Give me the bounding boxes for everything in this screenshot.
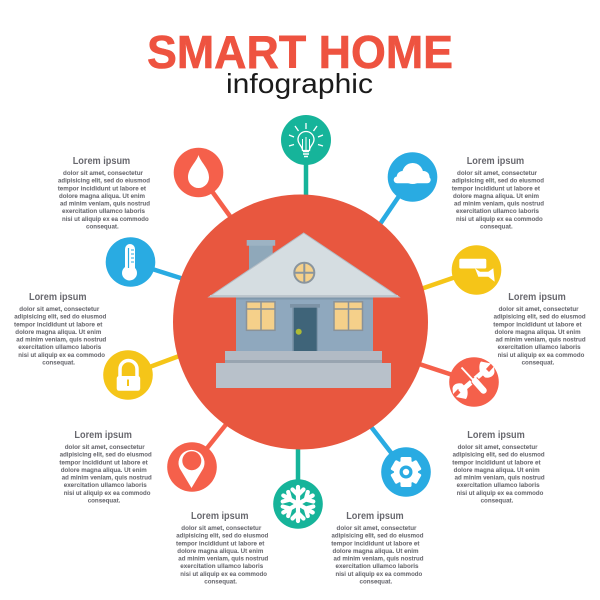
- text block: lower left: ad minim veniam, quis nostrud: [62, 474, 152, 482]
- text block: middle right: consequat.: [522, 359, 554, 366]
- text block: lower left: adipisicing elit, sed do eiusmod: [60, 452, 152, 458]
- text block: lower left: nisi ut aliquip ex ea commodo: [64, 490, 150, 497]
- text block: middle left: tempor incididunt ut labore et: [14, 322, 103, 328]
- text block: middle left: adipisicing elit, sed do eiusmod: [14, 314, 106, 320]
- text block: top left: tempor incididunt ut labore et: [58, 186, 147, 192]
- text block: bottom right: tempor incididunt ut labore et: [331, 540, 420, 548]
- icon: map pin: [167, 442, 217, 492]
- connector: camera: [415, 270, 476, 291]
- text block: lower right: Lorem ipsum: [467, 430, 525, 441]
- text block: bottom left: dolore magna aliqua. Ut enim: [177, 548, 263, 555]
- text block: lower right: ad minim veniam, quis nostrud: [455, 474, 545, 482]
- text block: middle right: dolore magna aliqua. Ut enim: [495, 329, 581, 336]
- text block: bottom right: ad minim veniam, quis nostrud: [334, 556, 424, 562]
- text block: middle right: tempor incididunt ut labore et: [493, 322, 582, 328]
- text block: lower left: [59, 430, 152, 504]
- text block: top left: [58, 156, 150, 230]
- text block: bottom left: dolor sit amet, consectetur: [181, 525, 262, 532]
- text block: bottom right: Lorem ipsum: [346, 511, 404, 522]
- text block: lower right: exercitation ullamco laboris: [457, 482, 540, 489]
- text block: middle right: [493, 292, 586, 366]
- text block: bottom left: nisi ut aliquip ex ea commodo: [180, 571, 267, 578]
- text block: bottom left: [176, 511, 268, 585]
- text block: top right: ad minim veniam, quis nostrud: [454, 200, 544, 208]
- icon: snowflake: [273, 479, 323, 529]
- text block: top right: adipisicing elit, sed do eiusmod: [452, 178, 544, 184]
- text block: top right: [452, 156, 544, 230]
- text block: bottom left: adipisicing elit, sed do eiusmod: [176, 532, 268, 540]
- icon: security camera: [452, 245, 501, 295]
- connector: thermometer: [130, 262, 190, 281]
- text block: middle right: Lorem ipsum: [508, 292, 566, 303]
- text block: lower left: dolore magna aliqua. Ut enim: [61, 467, 147, 474]
- text block: lower right: nisi ut aliquip ex ea commodo: [457, 490, 543, 497]
- text block: top right: dolor sit amet, consectetur: [457, 170, 537, 177]
- text block: lower right: tempor incididunt ut labore et: [452, 460, 541, 466]
- text block: top left: Lorem ipsum: [73, 156, 130, 167]
- text block: top left: exercitation ullamco laboris: [62, 208, 145, 215]
- text block: top right: dolore magna aliqua. Ut enim: [453, 193, 539, 200]
- text block: lower right: [452, 430, 545, 504]
- title: SMART HOME: [147, 26, 453, 78]
- text block: top right: tempor incididunt ut labore et: [452, 186, 541, 192]
- text block: top left: consequat.: [86, 223, 119, 230]
- icon: light bulb: [281, 115, 331, 165]
- text block: lower left: dolor sit amet, consectetur: [65, 444, 145, 451]
- icon: water drop: [174, 148, 223, 197]
- icon: cloud: [388, 152, 437, 202]
- text block: lower right: adipisicing elit, sed do eiusmod: [453, 452, 545, 458]
- connector: snowflake: [296, 440, 300, 504]
- text block: lower left: consequat.: [88, 497, 120, 504]
- text block: bottom right: nisi ut aliquip ex ea commodo: [336, 571, 422, 578]
- text block: middle left: dolor sit amet, consectetur: [19, 306, 100, 313]
- text block: lower left: Lorem ipsum: [74, 430, 132, 441]
- text block: top right: nisi ut aliquip ex ea commodo: [456, 216, 543, 223]
- text block: bottom left: tempor incididunt ut labore et: [176, 540, 265, 548]
- text block: top left: adipisicing elit, sed do eiusmod: [58, 178, 150, 184]
- text block: middle left: ad minim veniam, quis nostrud: [16, 336, 106, 344]
- text block: middle left: [14, 292, 106, 366]
- text block: bottom right: [331, 511, 424, 585]
- icon: thermometer: [106, 237, 155, 287]
- text block: bottom left: exercitation ullamco laboris: [180, 563, 263, 570]
- subtitle: infographic: [226, 68, 373, 99]
- text block: bottom right: dolore magna aliqua. Ut enim: [332, 548, 418, 555]
- connector: drop: [198, 172, 240, 230]
- text block: lower left: exercitation ullamco laboris: [64, 482, 147, 489]
- text block: top left: dolor sit amet, consectetur: [63, 170, 143, 177]
- text block: bottom left: ad minim veniam, quis nostrud: [178, 556, 268, 562]
- text block: lower left: tempor incididunt ut labore et: [59, 460, 148, 466]
- text block: middle right: ad minim veniam, quis nostrud: [496, 336, 586, 344]
- connector: cloud: [378, 177, 412, 227]
- text block: lower right: consequat.: [481, 497, 513, 504]
- text block: top left: nisi ut aliquip ex ea commodo: [62, 216, 149, 223]
- text block: lower right: dolore magna aliqua. Ut enim: [454, 467, 540, 474]
- text block: middle left: consequat.: [42, 359, 75, 366]
- icon: tools: [449, 357, 499, 407]
- text block: middle right: dolor sit amet, consectetur: [499, 306, 579, 313]
- connector: lock: [128, 352, 190, 375]
- text block: middle left: Lorem ipsum: [29, 292, 87, 303]
- text block: bottom left: Lorem ipsum: [191, 511, 249, 522]
- text block: top right: Lorem ipsum: [467, 156, 524, 167]
- house: [209, 233, 399, 388]
- text block: top left: ad minim veniam, quis nostrud: [60, 200, 150, 208]
- text block: middle right: nisi ut aliquip ex ea commodo: [498, 352, 584, 359]
- connector: pin: [192, 412, 236, 467]
- text block: lower right: dolor sit amet, consectetur: [458, 444, 538, 451]
- text block: middle right: adipisicing elit, sed do eiusmod: [494, 314, 586, 320]
- icon: padlock: [103, 350, 153, 400]
- icon: gear: [381, 447, 431, 497]
- connector: bulb: [304, 140, 308, 205]
- text block: top right: consequat.: [480, 223, 513, 230]
- text block: bottom right: consequat.: [360, 578, 392, 585]
- text block: middle right: exercitation ullamco laboris: [498, 344, 581, 351]
- connector: gear: [365, 419, 406, 472]
- text block: bottom right: exercitation ullamco laboris: [336, 563, 419, 570]
- connector: tools: [410, 361, 474, 382]
- text block: top left: dolore magna aliqua. Ut enim: [59, 193, 145, 200]
- text block: top right: exercitation ullamco laboris: [456, 208, 539, 215]
- text block: bottom right: dolor sit amet, consectetur: [336, 525, 417, 532]
- text block: middle left: nisi ut aliquip ex ea commodo: [18, 352, 105, 359]
- main circle: [173, 194, 428, 450]
- text block: middle left: dolore magna aliqua. Ut enim: [15, 329, 101, 336]
- text block: bottom left: consequat.: [204, 578, 237, 585]
- text block: bottom right: adipisicing elit, sed do eiusmod: [332, 532, 424, 540]
- text block: middle left: exercitation ullamco laboris: [18, 344, 101, 351]
